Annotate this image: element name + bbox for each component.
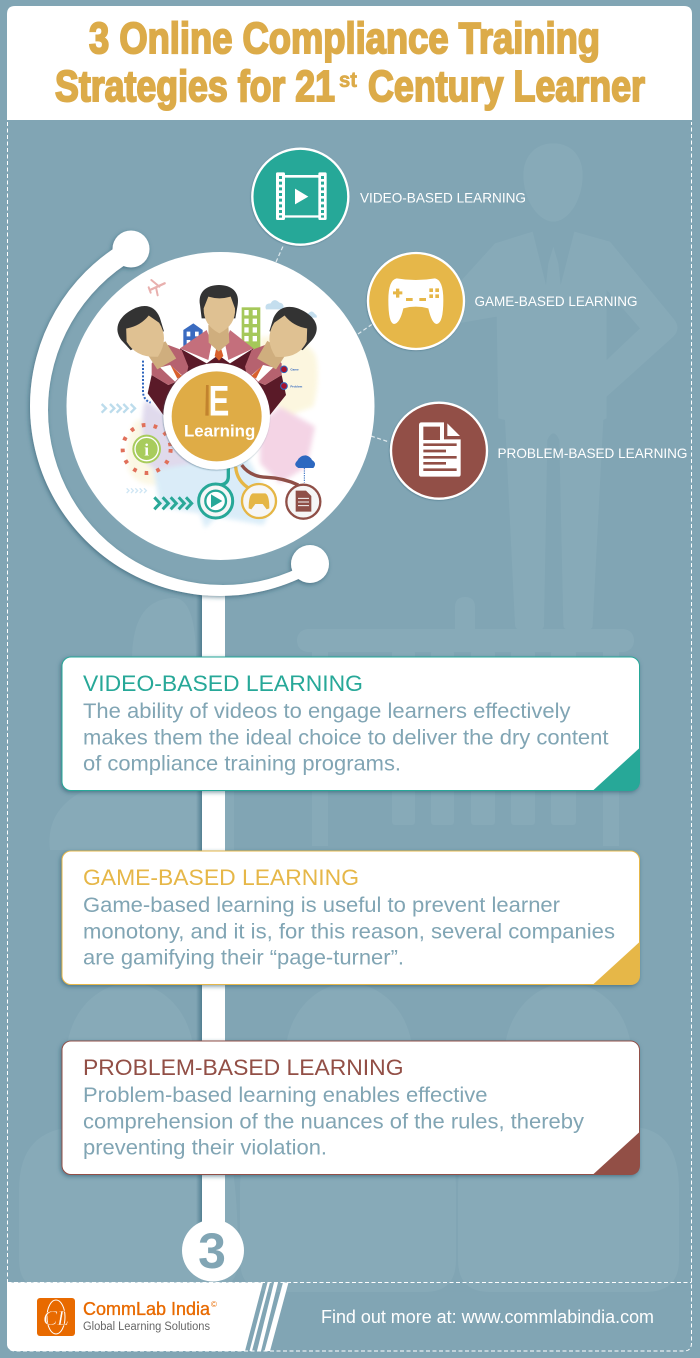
pastel blobs — [127, 337, 318, 528]
background silhouette: standing man — [420, 143, 677, 629]
central spine — [196, 585, 225, 1235]
center collar — [180, 330, 253, 360]
e-learning illustration — [102, 280, 323, 528]
title line 2: Strategies for 21 — [55, 62, 335, 111]
body text: The ability of videos to engage learners effectively — [83, 699, 571, 723]
number badge 3: 3 — [198, 1223, 226, 1279]
corner: teal — [593, 748, 640, 790]
heading: PROBLEM-BASED LEARNING — [83, 1055, 404, 1080]
tiny menu labels — [281, 366, 303, 389]
heading: VIDEO-BASED LEARNING — [83, 671, 363, 696]
corner: gold — [593, 942, 640, 984]
body text: of compliance training programs. — [83, 752, 401, 776]
footer white panel with stripes — [7, 1282, 288, 1351]
info badge — [123, 425, 171, 473]
body text: monotony, and it is, for this reason, several companies — [83, 920, 615, 944]
tiny menu labels: Problem — [290, 385, 303, 389]
brand name: CommLab India — [83, 1299, 211, 1319]
body text — [83, 699, 609, 776]
body text: are gamifying their “page-turner”. — [83, 946, 404, 970]
big white circle — [66, 252, 374, 560]
panel: problem-based learning — [62, 1041, 640, 1174]
center man head — [200, 285, 238, 352]
title line 2: Century Learner — [368, 62, 645, 111]
video badge — [199, 484, 233, 518]
clouds — [266, 300, 317, 318]
logo: CommLab India — [37, 1298, 75, 1336]
right man head — [252, 300, 323, 378]
logo: CommLab India: CL — [43, 1306, 69, 1330]
green building — [242, 307, 260, 349]
plane — [149, 280, 165, 295]
body text: comprehension of the nuances of the rules, thereby — [83, 1110, 584, 1134]
icon: game circle — [368, 253, 464, 349]
panel: game-based learning — [62, 851, 640, 984]
body text: Game-based learning is useful to prevent learner — [83, 893, 560, 917]
left man head — [111, 299, 182, 378]
background silhouette: table and seated figure — [49, 597, 634, 850]
shirts and ties — [160, 339, 273, 382]
brand name: © — [211, 1300, 217, 1309]
background silhouette: audience — [19, 983, 679, 1292]
info badge: i — [144, 440, 149, 459]
title line 1: 3 Online Compliance Training — [89, 14, 600, 63]
problem label: PROBLEM-BASED LEARNING — [498, 445, 688, 461]
blue building — [183, 323, 203, 350]
jackets — [148, 348, 286, 415]
game label: GAME-BASED LEARNING — [474, 293, 638, 309]
body text: Problem-based learning enables effective — [83, 1083, 488, 1107]
connector dashes — [276, 244, 389, 442]
e-learning badge: E — [209, 378, 229, 426]
panel: video-based learning — [62, 657, 640, 790]
title line 2 — [55, 62, 645, 111]
chevrons — [102, 404, 192, 509]
number badge 3 — [182, 1220, 244, 1282]
heading: GAME-BASED LEARNING — [83, 865, 359, 890]
game badge — [242, 484, 276, 518]
brand name: Global Learning Solutions — [83, 1321, 210, 1333]
title panel — [7, 6, 692, 120]
body text: preventing their violation. — [83, 1136, 327, 1160]
e-learning badge — [163, 363, 270, 470]
ring arc with knobs — [30, 230, 329, 596]
footer link text: Find out more at: www.commlabindia.com — [321, 1307, 654, 1327]
side pink jackets — [152, 345, 282, 385]
document badge — [286, 485, 320, 519]
icon: video circle — [252, 149, 348, 245]
icon: problem circle — [391, 403, 487, 499]
body text — [83, 1083, 584, 1160]
title line 2: st — [339, 69, 357, 92]
dotted line — [143, 361, 151, 403]
body text: makes them the ideal choice to deliver the dry content — [83, 726, 609, 750]
video label: VIDEO-BASED LEARNING — [360, 190, 526, 206]
brand name — [83, 1299, 217, 1333]
e-learning badge: Learning — [184, 422, 255, 441]
blue cloud — [295, 455, 315, 483]
connectors — [220, 465, 298, 489]
body text — [83, 893, 615, 970]
corner: brown — [593, 1132, 640, 1174]
tiny menu labels: Game — [290, 368, 299, 372]
